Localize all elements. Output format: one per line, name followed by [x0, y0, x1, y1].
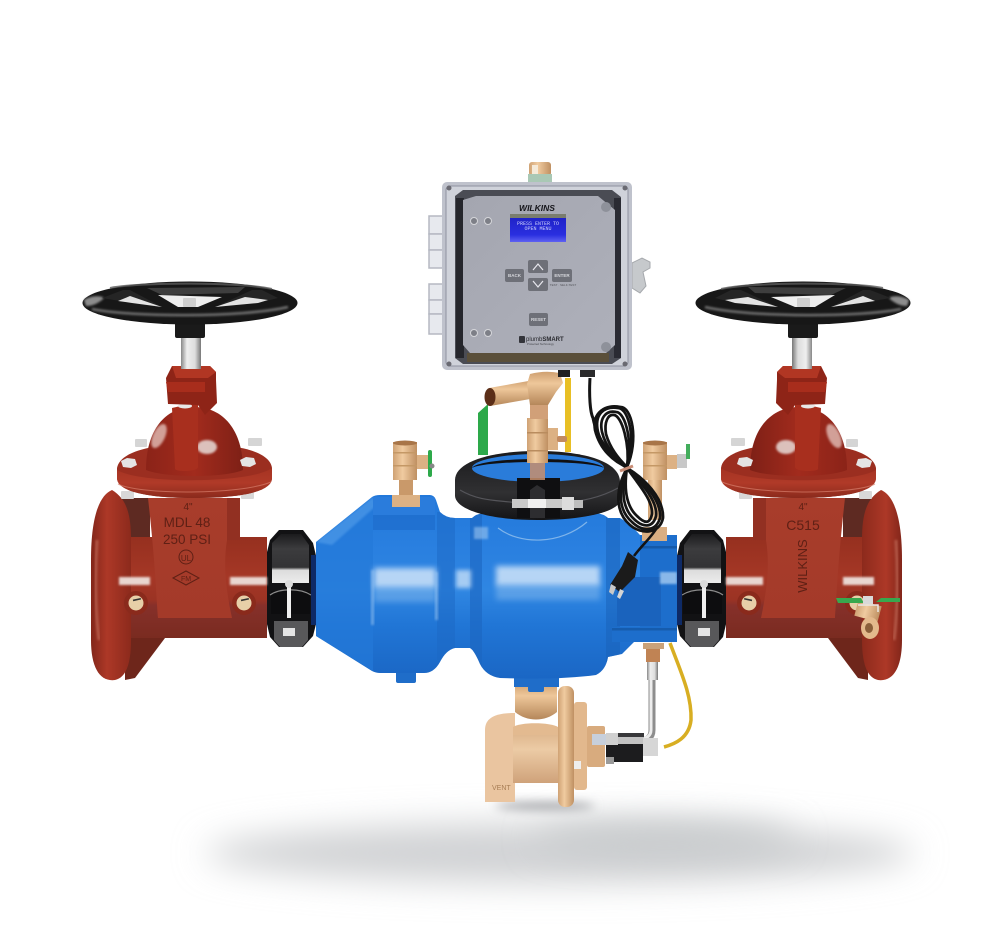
bronze relief valve: VENT: [492, 785, 511, 792]
ground shadow: [205, 802, 915, 883]
right coupling: [676, 530, 727, 647]
left enclosure hinges: [429, 216, 443, 334]
power plug: [609, 552, 638, 599]
plumbSMART logo: plumbSMART: [526, 337, 564, 343]
right test cock: [642, 440, 690, 541]
left gate valve: [82, 282, 298, 680]
right valve markings: 4": [798, 502, 808, 513]
coiled black power cord with plug: [590, 378, 663, 599]
left valve markings: 250 PSI: [163, 532, 211, 547]
blue valve body: [310, 490, 680, 692]
left valve markings: UL: [181, 554, 192, 563]
right valve markings: C515: [786, 517, 820, 533]
bronze relief valve: [485, 683, 605, 807]
LCD screen: [510, 214, 566, 242]
keypad buttons: RESET: [531, 317, 546, 322]
keypad buttons: [505, 260, 576, 326]
plumbSMART logo: Protected Technology: [527, 342, 554, 346]
electronics enclosure: [442, 182, 632, 377]
right valve markings: WILKINS: [795, 539, 810, 593]
keypad buttons: ENTER: [554, 273, 570, 278]
keypad buttons: BACK: [508, 273, 522, 278]
right gate valve: [696, 282, 910, 680]
brand logo: WILKINS: [519, 203, 555, 213]
black pressure sensor: [592, 733, 658, 764]
green ball valve handle: [478, 404, 488, 455]
left valve markings: [163, 502, 211, 585]
LCD screen: PRESS ENTER TO: [517, 221, 559, 227]
yellow sensor wire, upper: [565, 378, 571, 452]
brass tee and ball valve: [484, 372, 567, 480]
left coupling: [266, 530, 317, 647]
keypad buttons: TEST · SELF-TEST: [550, 283, 576, 287]
cord tie: [620, 466, 633, 471]
LCD screen: OPEN MENU: [524, 226, 552, 232]
left valve markings: FM: [181, 576, 191, 583]
left valve markings: MDL 48: [164, 515, 210, 530]
yellow sensor wire, lower: [664, 643, 691, 747]
left test cock: [392, 440, 434, 507]
right valve markings: [786, 502, 820, 593]
top conduit connector: [528, 162, 552, 182]
top grooved clamp: [455, 451, 620, 520]
product illustration: backflow preventer assembly: [82, 162, 914, 899]
right valve drain cock: [836, 596, 900, 639]
lower sensing line: fitting and chrome tube: [600, 643, 664, 741]
right enclosure latch: [632, 258, 650, 293]
left valve markings: 4": [183, 502, 193, 513]
plumbSMART logo: [519, 336, 564, 346]
